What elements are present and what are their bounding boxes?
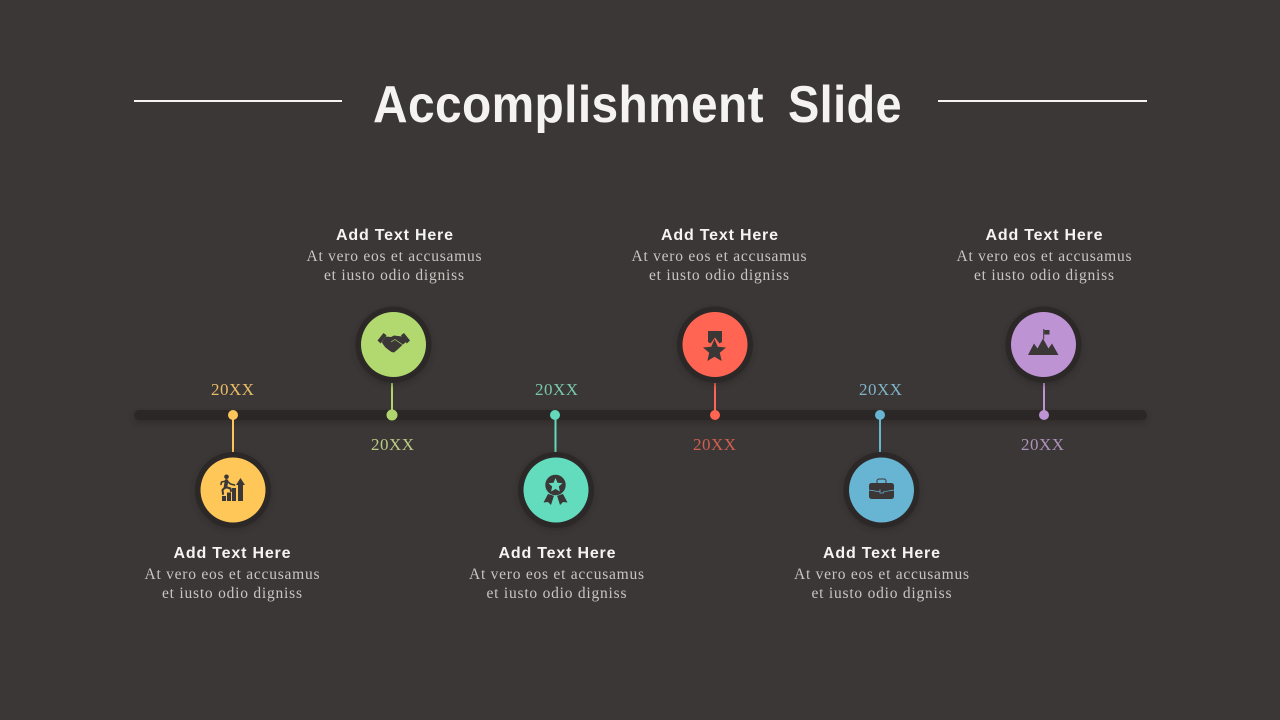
text block 4: At vero eos et accusamus bbox=[632, 248, 806, 265]
year label 6: 20XX bbox=[1021, 435, 1064, 454]
node 4 bbox=[677, 306, 753, 385]
text block 6: et iusto odio digniss bbox=[974, 267, 1114, 284]
text block 1 bbox=[144, 545, 320, 602]
connector 3 bbox=[550, 410, 560, 455]
year label 1: 20XX bbox=[211, 380, 254, 399]
text block 5: et iusto odio digniss bbox=[812, 585, 952, 602]
connector 6 bbox=[1039, 383, 1049, 420]
text block 3: At vero eos et accusamus bbox=[469, 566, 644, 583]
title: Slide bbox=[788, 76, 902, 134]
text block 4 bbox=[632, 227, 806, 284]
icon: climbing person on rising bars bbox=[221, 474, 245, 501]
icon: award ribbon bbox=[544, 474, 568, 505]
year label 4: 20XX bbox=[693, 435, 736, 454]
year label 2: 20XX bbox=[371, 435, 414, 454]
milestone 4: red bbox=[632, 227, 806, 454]
text block 3: Add Text Here bbox=[498, 545, 616, 562]
connector 1 bbox=[228, 410, 238, 455]
milestone 6: purple bbox=[956, 227, 1132, 454]
node 3 bbox=[518, 452, 594, 530]
text block 6: Add Text Here bbox=[986, 227, 1103, 244]
text block 3 bbox=[469, 545, 644, 602]
milestone 3: teal bbox=[469, 380, 644, 602]
text block 1: Add Text Here bbox=[174, 545, 291, 562]
timeline bar bbox=[134, 410, 1147, 423]
text block 1: et iusto odio digniss bbox=[162, 585, 302, 602]
connector 2 bbox=[386, 383, 398, 420]
node 6 bbox=[1006, 306, 1082, 385]
text block 2: et iusto odio digniss bbox=[324, 267, 464, 284]
text block 5: Add Text Here bbox=[823, 545, 940, 562]
text block 2 bbox=[306, 227, 482, 284]
milestone 2: green bbox=[306, 227, 482, 454]
node 2 bbox=[356, 306, 432, 385]
title: Accomplishment bbox=[373, 76, 764, 134]
text block 6: At vero eos et accusamus bbox=[956, 248, 1132, 265]
text block 5 bbox=[794, 545, 969, 602]
node 1 bbox=[195, 452, 271, 530]
text block 6 bbox=[956, 227, 1132, 284]
year label 3: 20XX bbox=[535, 380, 578, 399]
text block 5: At vero eos et accusamus bbox=[794, 566, 969, 583]
text block 2: At vero eos et accusamus bbox=[306, 248, 482, 265]
icon: star medal bbox=[703, 331, 726, 361]
text block 3: et iusto odio digniss bbox=[486, 585, 626, 602]
text block 2: Add Text Here bbox=[336, 227, 453, 244]
icon: briefcase bbox=[869, 479, 894, 499]
icon: mountain with flag bbox=[1028, 329, 1058, 355]
icon: handshake bbox=[378, 333, 410, 352]
milestone 1: yellow bbox=[144, 380, 320, 602]
year label 5: 20XX bbox=[859, 380, 902, 399]
milestone 5: blue bbox=[794, 380, 969, 602]
text block 1: At vero eos et accusamus bbox=[144, 566, 320, 583]
title bbox=[134, 76, 1147, 134]
node 5 bbox=[844, 452, 920, 530]
text block 4: et iusto odio digniss bbox=[649, 267, 789, 284]
connector 4 bbox=[710, 383, 720, 420]
connector 5 bbox=[875, 410, 885, 455]
text block 4: Add Text Here bbox=[661, 227, 778, 244]
